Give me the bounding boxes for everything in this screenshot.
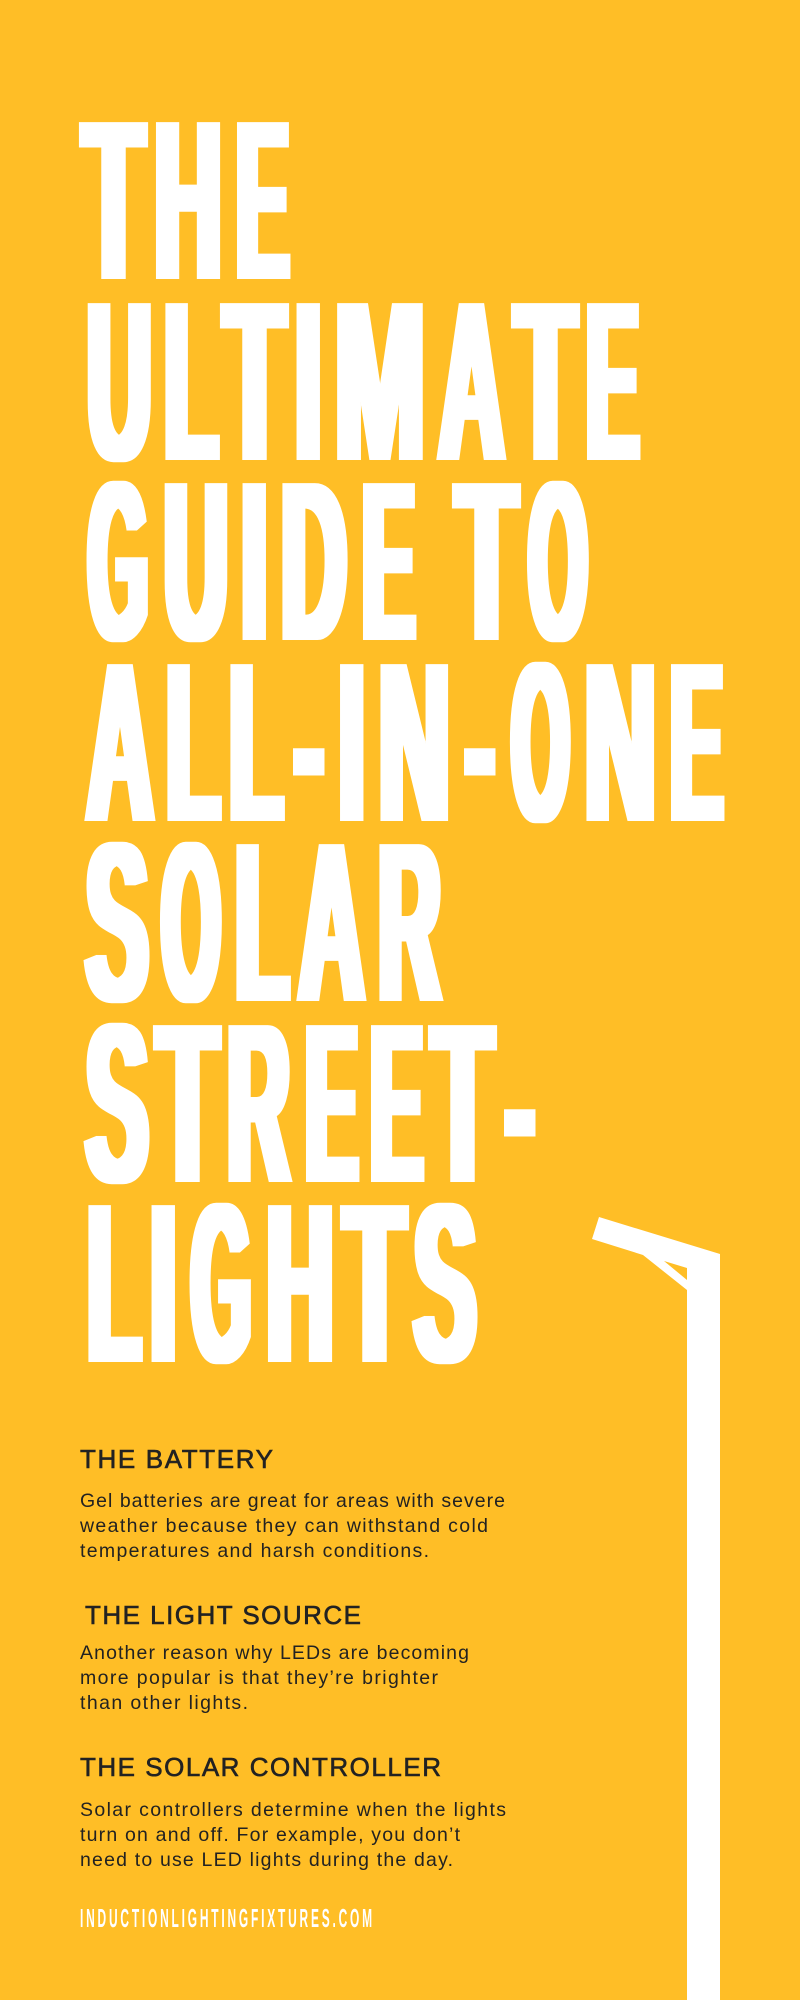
title: E	[306, 977, 358, 1231]
title: T	[83, 74, 144, 328]
text: the battery body	[79, 1490, 505, 1562]
title: H	[155, 74, 221, 328]
title: T	[515, 255, 576, 509]
title: S	[414, 1157, 476, 1411]
text: the light source body: more popular is that they’re brighter	[80, 1667, 438, 1689]
text: the solar controller body: Solar controllers determine when the lights	[80, 1799, 506, 1821]
section: the solar controller	[80, 1752, 506, 1871]
heading: the battery: THE BATTERY	[80, 1444, 273, 1474]
title: I	[295, 255, 321, 509]
text: the light source body: than other lights.	[80, 1692, 248, 1714]
title: L	[230, 616, 283, 870]
title: N	[585, 616, 656, 870]
title: A	[87, 616, 153, 870]
title: L	[167, 616, 220, 870]
text: the battery body: weather because they can withstand cold	[79, 1515, 488, 1537]
section: the light source	[80, 1600, 469, 1714]
icon: street light pole	[592, 1217, 720, 2000]
title: T	[224, 255, 285, 509]
title: H	[267, 1157, 333, 1411]
title: L	[88, 1157, 141, 1411]
title: E	[371, 977, 422, 1231]
title: G	[191, 1157, 251, 1411]
title: E	[587, 255, 638, 509]
text: the solar controller body: turn on and off. For example, you don’t	[80, 1824, 461, 1846]
title: U	[164, 435, 228, 689]
title: E	[363, 435, 414, 689]
title: S	[86, 977, 148, 1231]
title: I	[339, 616, 365, 870]
title: R	[379, 796, 440, 1050]
title: S	[86, 796, 148, 1050]
title	[83, 74, 723, 1411]
title: R	[228, 977, 289, 1231]
section: the battery	[79, 1444, 505, 1562]
title: D	[281, 435, 346, 689]
title: A	[439, 255, 504, 509]
title: L	[236, 796, 289, 1050]
title: N	[379, 616, 450, 870]
title: T	[344, 1157, 405, 1411]
heading: the solar controller: THE SOLAR CONTROLLER	[80, 1752, 441, 1782]
title: G	[88, 435, 148, 689]
title: O	[529, 435, 587, 689]
text: the battery body: temperatures and harsh conditions.	[80, 1540, 429, 1562]
title: M	[335, 255, 425, 509]
title: I	[241, 435, 267, 689]
title: A	[299, 796, 364, 1050]
title: -	[506, 977, 534, 1231]
title: -	[295, 616, 323, 870]
text: the light source body: Another reason why LEDs are becoming	[80, 1642, 469, 1664]
title: I	[150, 1157, 176, 1411]
text: the solar controller body	[80, 1799, 506, 1871]
title: E	[237, 74, 288, 328]
title: O	[512, 616, 569, 870]
text: the solar controller body: need to use LED lights during the day.	[80, 1849, 453, 1871]
text: the light source body	[80, 1642, 469, 1714]
title: T	[157, 977, 218, 1231]
title: T	[432, 977, 493, 1231]
title: O	[162, 796, 220, 1050]
title: -	[466, 616, 494, 870]
title: T	[456, 435, 517, 689]
website url: INDUCTIONLIGHTINGFIXTURES.COM	[80, 1905, 372, 1933]
title: L	[165, 255, 218, 509]
text: the battery body: Gel batteries are great for areas with severe	[80, 1490, 505, 1512]
heading: the light source: THE LIGHT SOURCE	[85, 1600, 361, 1630]
title: U	[87, 255, 151, 509]
